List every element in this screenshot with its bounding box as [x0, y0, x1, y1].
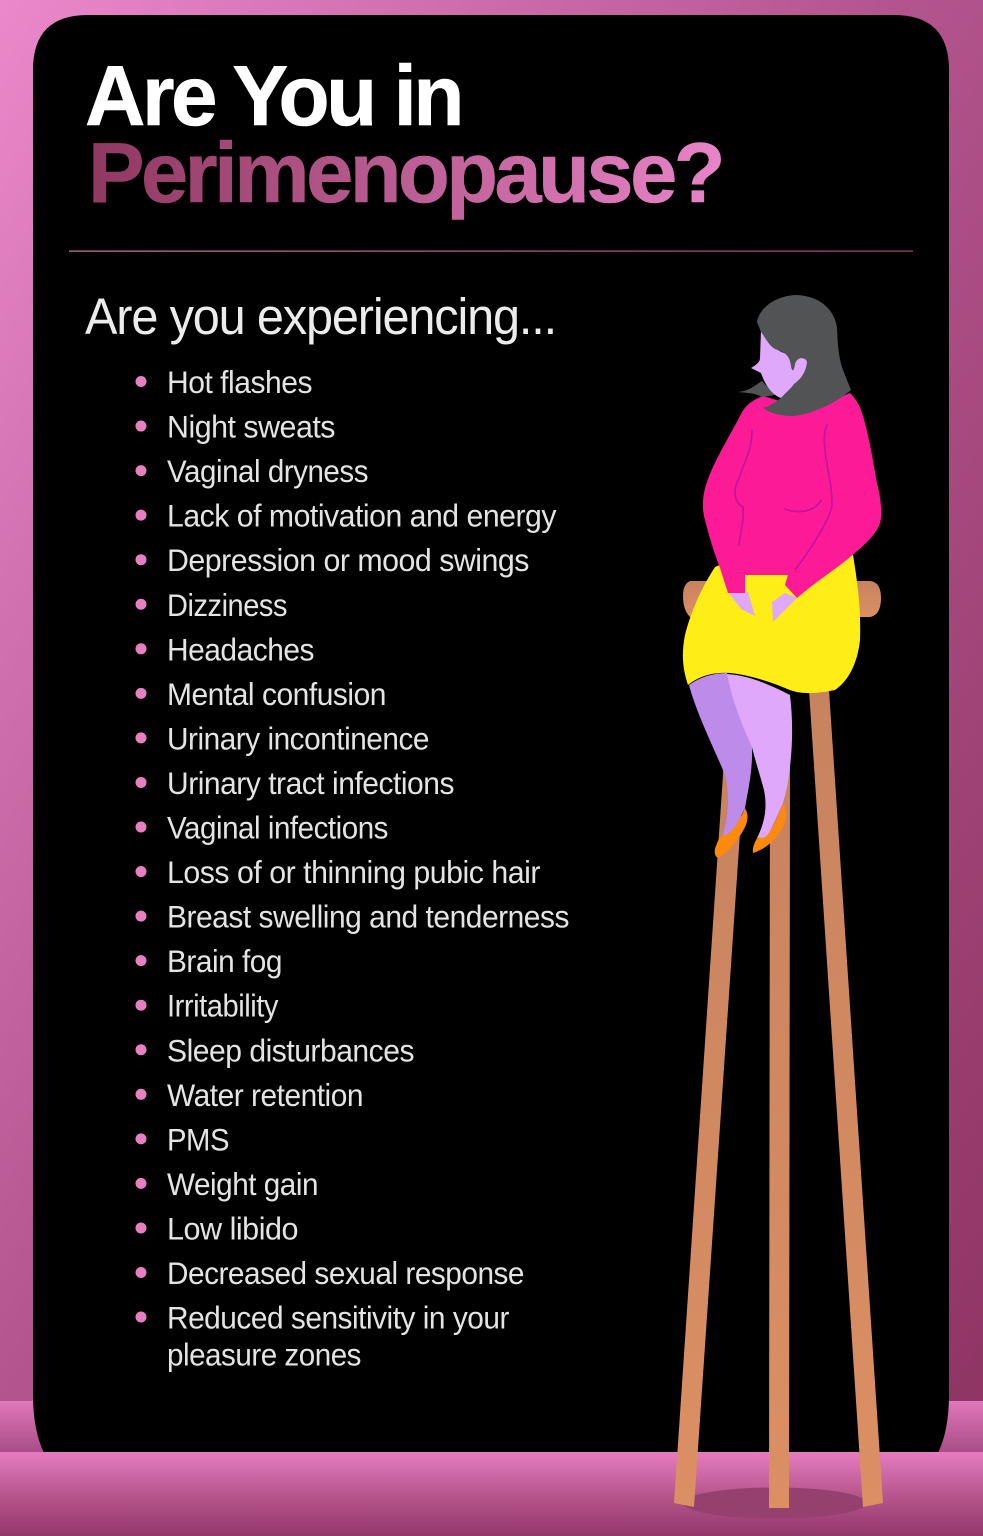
symptom list: PMS	[167, 1121, 229, 1157]
symptom list: pleasure zones	[167, 1336, 361, 1372]
symptom list: Sleep disturbances	[167, 1032, 414, 1068]
subheading: Are you experiencing...	[85, 288, 556, 345]
symptom list: Loss of or thinning pubic hair	[167, 854, 540, 890]
title: Are You in	[85, 49, 461, 144]
symptom list: Breast swelling and tenderness	[167, 899, 569, 935]
symptom list: Low libido	[167, 1210, 298, 1246]
title	[85, 49, 722, 221]
illustration: woman	[683, 295, 881, 858]
rear floor band	[0, 1401, 983, 1453]
far leg	[689, 673, 752, 838]
hair back strand	[738, 381, 775, 397]
symptom list: Brain fog	[167, 943, 282, 979]
symptom list: Lack of motivation and energy	[167, 498, 557, 534]
sweater fold lines	[735, 425, 832, 570]
symptom list: Vaginal dryness	[167, 453, 368, 489]
symptom list: Depression or mood swings	[167, 542, 529, 578]
skirt	[683, 540, 860, 693]
foreground floor	[0, 1452, 983, 1536]
symptom list: Vaginal infections	[167, 810, 388, 846]
symptom list: Water retention	[167, 1077, 363, 1113]
near leg	[727, 674, 792, 838]
sweater	[703, 393, 881, 598]
stool shadow	[683, 1488, 867, 1518]
symptom list: Weight gain	[167, 1166, 318, 1202]
symptom list	[136, 364, 569, 1372]
symptom list: Urinary tract infections	[167, 765, 454, 801]
shoes	[715, 803, 786, 858]
symptom list: Mental confusion	[167, 676, 386, 712]
symptom list: Irritability	[167, 988, 279, 1024]
hands	[728, 592, 797, 622]
symptom list: Headaches	[167, 631, 314, 667]
symptom list: Reduced sensitivity in your	[167, 1300, 509, 1336]
symptom list: Hot flashes	[167, 364, 312, 400]
hair	[757, 295, 851, 416]
title: Perimenopause?	[88, 126, 722, 221]
symptom list: Decreased sexual response	[167, 1255, 524, 1291]
symptom list: Urinary incontinence	[167, 720, 429, 756]
symptom list: Night sweats	[167, 409, 335, 445]
face	[751, 330, 808, 398]
symptom list: Dizziness	[167, 587, 287, 623]
illustration: stool	[674, 581, 883, 1508]
